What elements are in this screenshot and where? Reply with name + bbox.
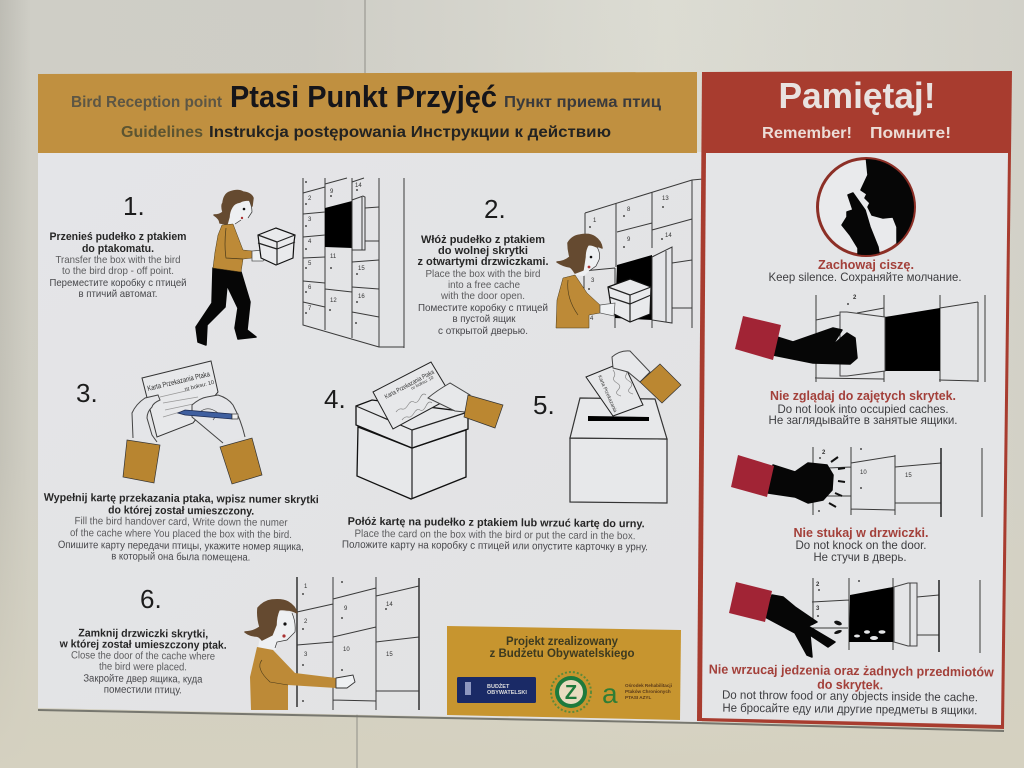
logo: citizens budget (457, 677, 536, 703)
icon: silence (816, 157, 916, 257)
steps 4 and 5 text: Положите карту на коробку с птицей или опустите карточку в урну. (342, 539, 648, 553)
title: bird reception point: Bird Reception point (71, 94, 223, 111)
step 5 illustration: ballot box: Karta Przekazania (596, 374, 618, 414)
sponsor box: z Budżetu Obywatelskiego (490, 646, 634, 660)
step 3 illustration: filling card: nr boksu: 10 (184, 380, 215, 393)
rule 4 text (708, 662, 995, 717)
title: Polish: Ptasi Punkt Przyjęć (230, 79, 497, 114)
panel: instructions board (38, 72, 703, 722)
rule 3 text: Do not knock on the door. (796, 538, 926, 552)
step 2 locker: 13 (662, 196, 669, 202)
step 2 text: z otwartymi drzwiczkami. (418, 256, 548, 268)
step 6 text: the bird were placed. (99, 661, 187, 673)
step 2 text: Place the box with the bird (426, 268, 541, 280)
rule 4 text: Nie wrzucaj jedzenia oraz żadnych przedmiotów (709, 662, 995, 680)
step 1 text: Transfer the box with the bird (56, 254, 181, 266)
step 2 text (418, 234, 548, 337)
step 6 locker: 10 (343, 647, 350, 653)
step 2 text: Włóż pudełko z ptakiem (421, 234, 545, 246)
step 3 text: of the cache where You placed the box with the bird. (70, 527, 292, 541)
step 2 person (556, 234, 602, 328)
step 1 locker: 3 (308, 217, 312, 223)
sponsor box (447, 626, 681, 720)
step 2 locker: 8 (627, 207, 631, 213)
logo: zoo (551, 672, 591, 712)
step 1 locker: 6 (308, 285, 312, 291)
step 1 text: в птичий автомат. (78, 288, 158, 300)
step 6 locker: 1 (304, 584, 308, 590)
step 4 number: 4. (324, 384, 346, 414)
step 1 locker: 16 (358, 294, 365, 300)
step 4 illustration: card on box: nr boksu: 10 (410, 375, 435, 391)
rule 3 text: Не стучи в дверь. (814, 550, 906, 564)
step 6 text: Zamknij drzwiczki skrytki, (78, 627, 208, 641)
rule 3 text (794, 525, 928, 564)
header band: title (38, 72, 697, 153)
rule 3 text: Nie stukaj w drzwiczki. (794, 525, 928, 540)
step 1 locker: 11 (330, 254, 337, 260)
illustration: do not knock: 10 (860, 470, 867, 476)
step 2 locker: 14 (665, 233, 672, 239)
step 6 locker: 3 (304, 652, 308, 658)
step 4 illustration: card on box: Karta Przekazania Ptaka (384, 369, 436, 401)
heading: Pamiętaj: Pamiętaj! (778, 75, 936, 116)
step 6 text: поместили птицу. (104, 684, 182, 696)
step 6 text (58, 627, 227, 697)
step 4 illustration: card on box (356, 362, 503, 499)
step 1 text: to the bird drop - off point. (62, 265, 174, 277)
step 2 text: with the door open. (440, 290, 525, 302)
logo: ptasi azyl (602, 678, 672, 709)
illustration: do not throw food: 2 (816, 582, 820, 588)
subtitle: guidelines: Guidelines (121, 124, 203, 141)
rule 1 text: Keep silence. Сохраняйте молчание. (768, 270, 962, 284)
logo: ptasi azyl: a (602, 678, 618, 709)
step 1 text: do ptakomatu. (82, 243, 154, 255)
panel: remember (697, 71, 1012, 729)
rule 2 text: Не заглядывайте в занятые ящики. (768, 413, 958, 427)
step 1 locker: 15 (358, 266, 365, 272)
step 1 locker: 7 (308, 306, 312, 312)
step 6 locker: 9 (344, 606, 348, 612)
step 6 locker: 14 (386, 602, 393, 608)
subtitle: Polish and Russian: Instrukcja postępowania Инструкции к действию (209, 124, 611, 141)
subheading: Russian: Помните! (870, 125, 951, 142)
illustration: do not look: 2 (853, 295, 857, 301)
inner white panel (702, 153, 1008, 725)
rule 4 text: Не бросайте еду или другие предметы в ящики. (722, 701, 977, 717)
illustration: do not look (735, 295, 985, 382)
illustration: do not throw food (729, 578, 980, 657)
step 3 text (43, 492, 319, 564)
step 3 text: Опишите карту передачи птицы, укажите номер ящика, (58, 539, 304, 553)
rule 2 text: Nie zglądaj do zajętych skrytek. (770, 388, 956, 403)
rule 1 text (768, 257, 962, 284)
illustration: do not knock: 2 (822, 450, 826, 456)
step 6 text: Закройте двер ящика, куда (83, 672, 203, 686)
logo: zoo: Z (565, 682, 577, 704)
step 2 locker (583, 179, 703, 328)
step 1 text: Przenieś pudełko z ptakiem (50, 231, 187, 243)
step 3 illustration: filling card (123, 361, 262, 484)
step 2 locker: 3 (591, 278, 595, 284)
step 2 locker: 1 (593, 218, 597, 224)
step 3 number: 3. (76, 378, 98, 408)
illustration: do not knock: 15 (905, 473, 912, 479)
step 1 person carrying box (196, 190, 256, 345)
step 5 number: 5. (533, 390, 555, 420)
logo: citizens budget: BUDŻET (487, 683, 510, 690)
step 1 locker: 14 (355, 183, 362, 189)
step 2 text: do wolnej skrytki (438, 245, 528, 257)
illustration: do not throw food: 3 (816, 606, 820, 612)
step 1 text (50, 231, 187, 300)
step 2 box (600, 279, 651, 322)
rule 4 text: do skrytek. (817, 677, 883, 692)
step 3 text: в который она была помещена. (111, 550, 250, 564)
step 6 text: w której został umieszczony ptak. (59, 638, 227, 652)
rule 2 text: Do not look into occupied caches. (778, 402, 948, 416)
step 1 number: 1. (123, 191, 145, 221)
subheading: remember: Remember! (762, 125, 852, 142)
step 1 locker: 12 (330, 298, 337, 304)
step 2 text: с открытой дверью. (438, 325, 528, 337)
steps 4 and 5 text (342, 516, 648, 553)
logo: ptasi azyl: Ptaków Chronionych (625, 689, 671, 694)
logo: citizens budget: OBYWATELSKI (487, 690, 527, 696)
rule 1 text: Zachowaj ciszę. (818, 257, 914, 272)
steps 4 and 5 text: Połóż kartę na pudełko z ptakiem lub wrzuć kartę do urny. (348, 516, 645, 530)
step 2 number: 2. (484, 194, 506, 224)
step 1 locker: 9 (330, 189, 334, 195)
step 5 illustration: ballot box (570, 351, 681, 503)
illustration: do not knock (731, 447, 982, 517)
step 1 locker: 4 (308, 239, 312, 245)
step 6 locker: 15 (386, 652, 393, 658)
logo: ptasi azyl: PTASI AZYL (625, 695, 651, 700)
step 6 person closing door (245, 600, 355, 710)
rule 2 text (768, 388, 958, 427)
step 1 locker (303, 178, 404, 348)
step 2 text: в пустой ящик (452, 313, 516, 325)
step 6 locker (297, 577, 419, 710)
logo: ptasi azyl: Ośrodek Rehabilitacji (625, 683, 672, 688)
sponsor text: Projekt zrealizowany (506, 634, 618, 648)
step 6 number: 6. (140, 584, 162, 614)
step 1 locker: 5 (308, 261, 312, 267)
rule 4 text: Do not throw food or any objects inside the cache. (722, 688, 978, 704)
step 1 locker: 2 (308, 196, 312, 202)
step 1 box (252, 228, 295, 265)
step 3 text: Wypełnij kartę przekazania ptaka, wpisz numer skrytki (44, 492, 319, 506)
step 6 text: Close the door of the cache where (71, 649, 215, 663)
title: Russian: Пункт приема птиц (504, 94, 661, 111)
step 2 text: Поместите коробку с птицей (418, 302, 548, 314)
step 3 text: Fill the bird handover card, Write down the numer (75, 515, 288, 529)
step 3 text: do której został umieszczony. (108, 504, 254, 518)
step 2 text: into a free cache (448, 279, 520, 291)
step 6 locker: 2 (304, 619, 308, 625)
step 3 illustration: filling card: Karta Przekazania Ptaka (146, 369, 211, 393)
step 2 locker: 4 (590, 316, 594, 322)
step 2 locker: 9 (627, 237, 631, 243)
step 1 text: Переместите коробку с птицей (50, 277, 187, 289)
steps 4 and 5 text: Place the card on the box with the bird or put the card in the box. (354, 528, 636, 542)
